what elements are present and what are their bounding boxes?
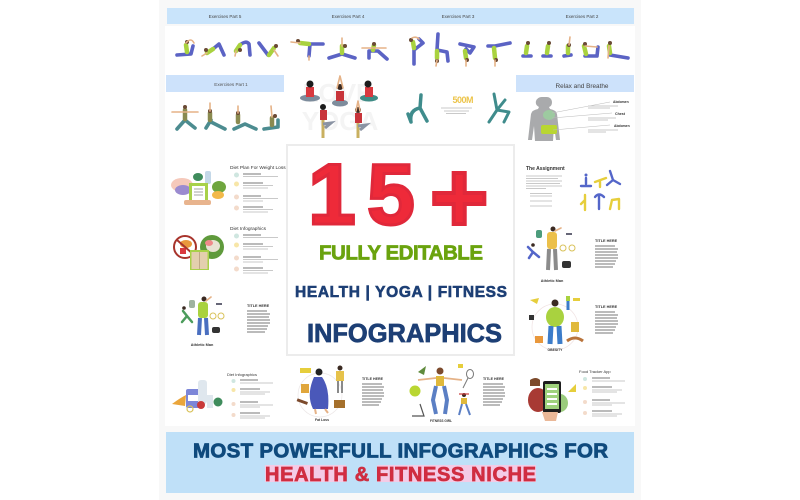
fully editable: FULLY EDITABLE (319, 242, 483, 264)
card: the assignment (526, 166, 620, 210)
slide: fitness girl (410, 364, 505, 423)
illustration: checklist with food (171, 171, 226, 205)
header bar: exercise parts 5 to 2 (167, 8, 634, 24)
card: obesity: TITLE HERE (595, 305, 618, 309)
exercise part 3 figures (409, 34, 510, 66)
header bar: exercise parts 5 to 2: Exercises Part 4 (332, 14, 365, 19)
exercise part 2 figures (523, 37, 628, 58)
slide: fat loss (297, 366, 384, 422)
illustration: athletic man (182, 296, 224, 335)
slide: fat loss: Fat Loss (315, 418, 329, 422)
slide: fitness girl: TITLE HERE (483, 377, 505, 381)
heading bar: exercises part 1: Exercises Part 1 (214, 82, 248, 87)
card: athletic man right (528, 226, 618, 283)
header bar: exercise parts 5 to 2: Exercises Part 3 (442, 14, 475, 19)
illustration: overweight man with food icons (529, 296, 583, 350)
500M stat with teal figures: 500M (452, 95, 474, 105)
body silhouette with breathing labels (528, 97, 630, 141)
list items (234, 172, 278, 212)
body silhouette with breathing labels: Abdomen (613, 100, 629, 104)
heading bar: exercises part 1 (166, 75, 284, 92)
bottom row slides (167, 360, 634, 426)
slide: food tracker app (528, 369, 625, 421)
slide: diet infographics (172, 372, 273, 418)
banner line 2: HEALTH & FITNESS NICHE (265, 464, 536, 486)
headline 15+: 5 (367, 147, 415, 243)
central promo panel (286, 142, 515, 356)
exercise part 4 figures (291, 38, 387, 60)
ghost love yoga lettering (302, 78, 378, 136)
card: the assignment: The Assignment (526, 166, 565, 172)
card: athletic man left (166, 287, 284, 353)
card: obesity (529, 296, 618, 352)
card: obesity: OBESITY (548, 348, 563, 352)
card: diet infographics (174, 226, 278, 273)
slide: food tracker app: Food Tracker App (579, 369, 611, 374)
exercise part 1 figures (172, 103, 278, 129)
infographics: INFOGRAPHICS (307, 320, 502, 348)
slide: fitness girl: FITNESS GIRL (430, 419, 452, 423)
yoga women group (300, 76, 378, 138)
yoga pose icons (581, 171, 620, 210)
illustration: no junk food, healthy plate, book (174, 235, 224, 270)
exercise part 5 figures (177, 40, 278, 56)
body silhouette with breathing labels: Abdomen (614, 124, 630, 128)
card: diet plan for weight loss: Diet Plan For Weight Loss (230, 165, 286, 171)
card: athletic man right: TITLE HERE (595, 239, 618, 243)
card: diet plan for weight loss (171, 165, 286, 212)
headline 15+ (308, 142, 488, 254)
card: athletic man right: Athletic Man (541, 279, 564, 283)
headline 15+: + (430, 142, 488, 254)
header bar: exercise parts 5 to 2: Exercises Part 5 (209, 14, 242, 19)
slide: diet infographics: Diet Infographics (227, 372, 257, 377)
body silhouette with breathing labels: Chest (615, 112, 626, 116)
heading bar: relax and breathe: Relax and Breathe (556, 83, 609, 90)
banner line 1: MOST POWERFULL INFOGRAPHICS FOR (193, 440, 608, 462)
list items (234, 234, 278, 273)
card: athletic man left: Athletic Man (191, 343, 214, 347)
health yoga fitness: HEALTH | YOGA | FITNESS (295, 284, 507, 301)
header bar: exercise parts 5 to 2: Exercises Part 2 (566, 14, 599, 19)
headline 15+: 1 (308, 147, 356, 243)
card: athletic man left: TITLE HERE (247, 304, 270, 308)
bottom banner (166, 432, 634, 493)
heading bar: relax and breathe (516, 75, 634, 92)
card: diet infographics: Diet Infographics (230, 226, 267, 232)
slide: fat loss: TITLE HERE (362, 377, 384, 381)
ghost love yoga lettering: LOVE (303, 78, 373, 108)
500M stat with teal figures (408, 94, 509, 122)
illustration: athletic man (528, 226, 575, 270)
ghost love yoga lettering: YOGA (302, 106, 378, 136)
